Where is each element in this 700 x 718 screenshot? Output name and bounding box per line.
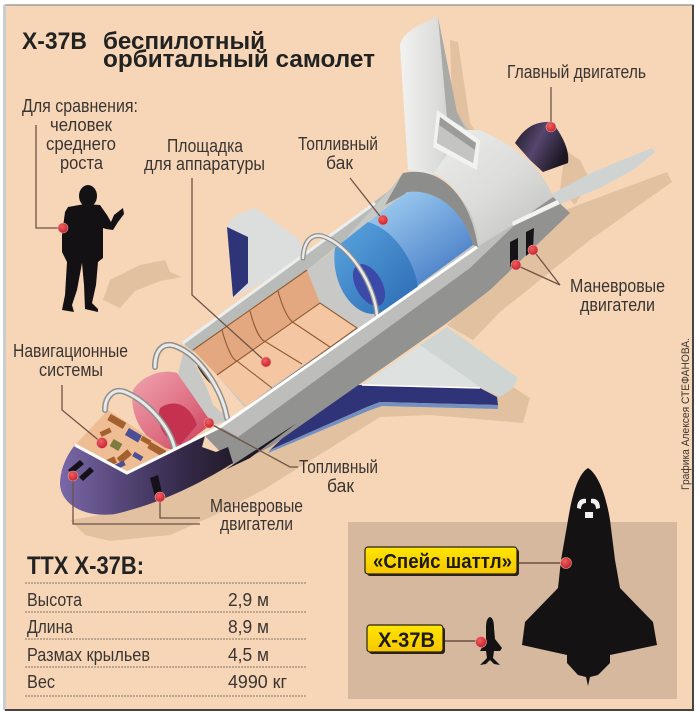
aircraft shadows [70, 40, 672, 541]
maneuvering thrusters, rear [510, 228, 534, 267]
label: payload platform: для аппаратуры [144, 154, 265, 174]
label: navigation systems: Навигационные [13, 341, 128, 361]
label: fuel tank top: Топливный [298, 134, 378, 154]
navigation bay [75, 410, 173, 473]
table row: length: 8,9 м [228, 617, 269, 637]
label: human comparison: среднего [46, 134, 116, 154]
shuttle comparison panel [348, 468, 677, 699]
table row: length: Длина [27, 617, 74, 637]
label: maneuvering engines bottom [210, 496, 303, 534]
label: x-37b: Х-37В [378, 629, 435, 652]
shuttle silhouette [522, 468, 657, 686]
title: орбитальный самолет [103, 46, 375, 73]
label: fuel tank bottom [299, 457, 378, 496]
rear wing [511, 148, 655, 226]
label: human comparison: роста [60, 153, 104, 173]
nose cone [60, 247, 477, 515]
table row: height: 2,9 м [228, 590, 269, 610]
label: x-37b [367, 625, 480, 654]
table row: wingspan: 4,5 м [228, 645, 269, 665]
title: беспилотный [103, 28, 265, 55]
lower wing [268, 327, 518, 453]
callout lines [36, 87, 560, 524]
frame rings [105, 236, 377, 450]
label: fuel tank bottom: бак [327, 476, 354, 496]
label: human comparison: человек [50, 115, 112, 135]
label: maneuvering engines right: Маневровые [570, 276, 665, 296]
label: fuel tank top: бак [326, 153, 353, 173]
fuel tank: blue [334, 192, 473, 314]
label: maneuvering engines bottom: Маневровые [210, 496, 303, 516]
table row: weight: Вес [27, 672, 55, 692]
table row: wingspan: Размах крыльев [27, 645, 150, 665]
label: maneuvering engines right [570, 276, 665, 315]
table row: length [27, 617, 269, 637]
payload bay [193, 270, 357, 407]
label: payload platform: Площадка [167, 136, 244, 156]
table row: height: Высота [27, 590, 83, 610]
specifications table [25, 552, 307, 696]
label: fuel tank bottom: Топливный [299, 457, 378, 477]
air intake [433, 110, 480, 170]
label: maneuvering engines right: двигатели [580, 295, 655, 315]
table row: height [27, 590, 269, 610]
x-37b silhouette [480, 617, 502, 665]
human silhouette [62, 185, 124, 312]
title: Х-37В [22, 28, 87, 55]
label: space shuttle: «Спейс шаттл» [373, 551, 512, 573]
label: payload platform [144, 136, 265, 174]
table row: weight [27, 672, 287, 692]
fuselage body [183, 130, 570, 465]
title [22, 28, 375, 73]
label: main engine: Главный двигатель [507, 62, 646, 82]
label: navigation systems: системы [39, 360, 103, 380]
label: human comparison: Для сравнения: [22, 96, 138, 116]
main engine [515, 122, 568, 172]
table heading: ТТХ Х-37В: [27, 552, 144, 580]
upper tail fin [400, 17, 470, 178]
fuel tank: pink [132, 345, 230, 450]
callout dots [58, 122, 572, 648]
left wing [227, 208, 305, 298]
graphic credit: Графика Алексея СТЕФАНОВА. [680, 338, 692, 490]
label: human comparison [22, 96, 138, 173]
label: fuel tank top [298, 134, 378, 173]
label: navigation systems [13, 341, 128, 380]
table row: weight: 4990 кг [228, 672, 287, 692]
label: space shuttle [365, 547, 565, 576]
label: maneuvering engines bottom: двигатели [220, 514, 293, 534]
interior base [193, 177, 478, 410]
table row: wingspan [27, 645, 269, 665]
